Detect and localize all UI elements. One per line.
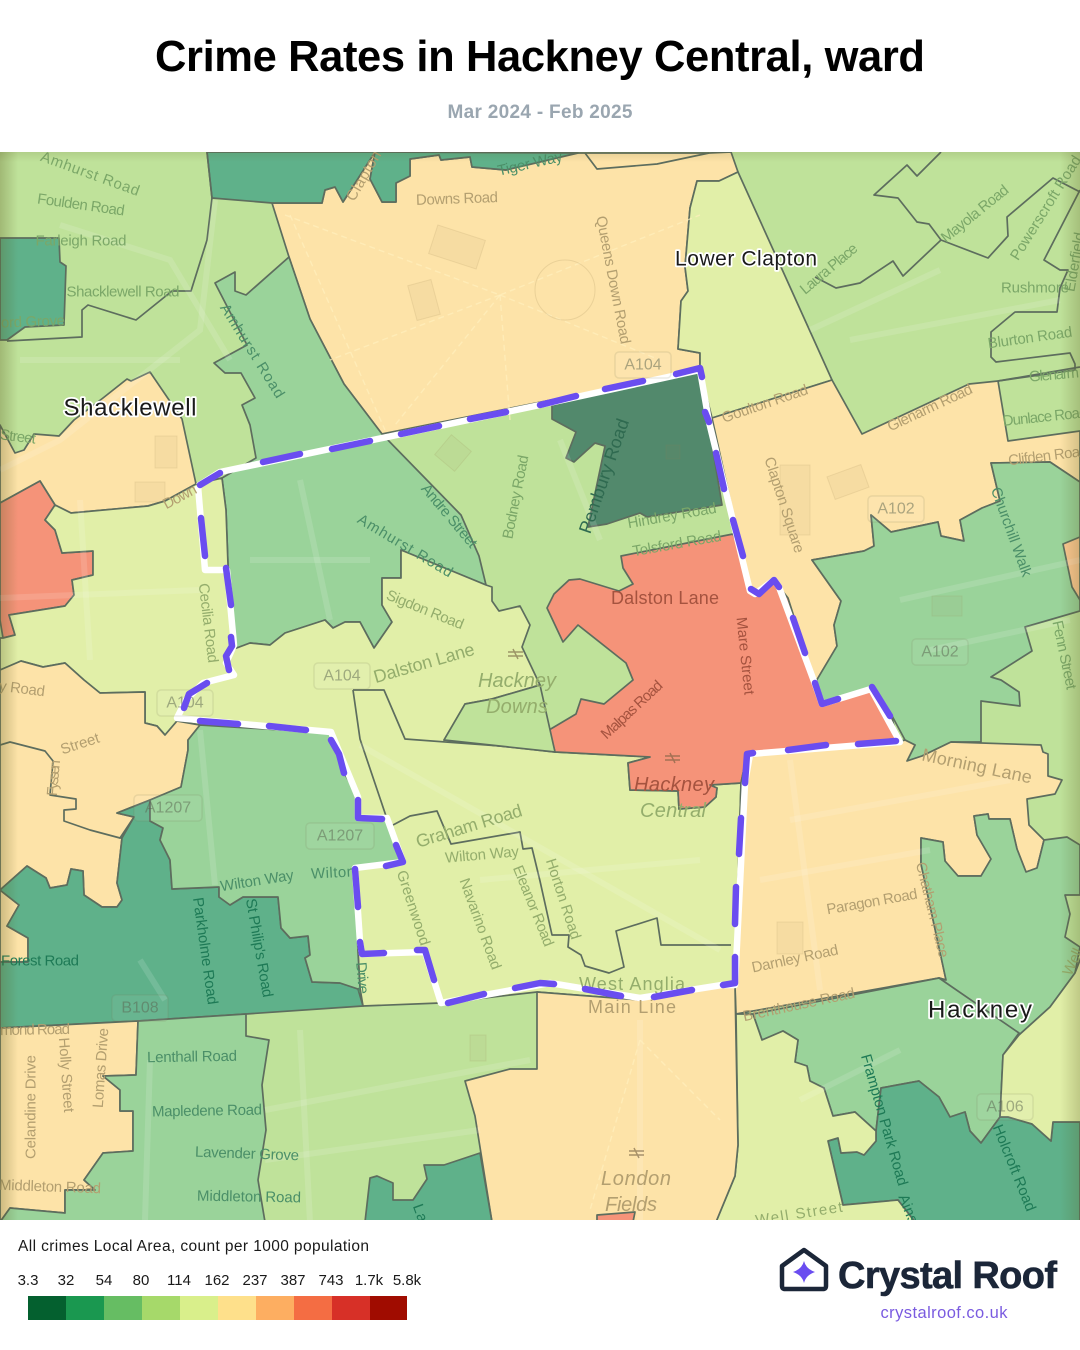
map labels: Fields <box>605 1194 657 1216</box>
map labels: Hackney <box>634 774 715 796</box>
street network and building footprints <box>0 200 1080 1222</box>
map labels: Downs <box>486 696 548 718</box>
legend colour swatches <box>28 1296 407 1320</box>
map labels: Street <box>58 729 102 758</box>
map labels: Hackney <box>928 996 1032 1024</box>
map labels: Horton Road <box>542 856 584 942</box>
map labels: Clapton Square <box>760 455 808 555</box>
map labels: Churchill Walk <box>987 485 1035 580</box>
map labels: ord Grove <box>1 312 65 332</box>
map edge vignette <box>0 152 1080 1220</box>
legend scale labels: 743 <box>318 1272 344 1289</box>
legend scale labels: 162 <box>204 1272 230 1289</box>
legend scale labels: 114 <box>167 1272 191 1289</box>
map labels: Central <box>640 800 707 822</box>
legend scale labels: 3.3 <box>18 1272 38 1289</box>
map labels: Lavender Grove <box>195 1144 299 1164</box>
map labels: Tolsford Road <box>631 528 723 560</box>
map labels: London <box>601 1168 671 1190</box>
map labels: Graham Road <box>413 800 525 852</box>
map labels: Wilton <box>311 863 355 883</box>
map labels: Mapledene Road <box>152 1102 262 1120</box>
map labels: Darnley Road <box>750 942 840 976</box>
title: Crime Rates in Hackney Central, ward <box>155 33 925 81</box>
map labels: Middleton Road <box>197 1188 301 1206</box>
map labels: Eleanor Road <box>509 863 557 949</box>
road number badges: A104 <box>624 356 662 374</box>
map labels: Fenn Street <box>1048 619 1080 692</box>
map labels: Sigdon Road <box>384 587 466 633</box>
map labels: Drive <box>352 961 372 995</box>
map labels: Hackney <box>478 670 557 692</box>
road number badges: A106 <box>986 1098 1024 1116</box>
map labels: Foulden Road <box>36 190 126 220</box>
map labels: Holly Street <box>55 1037 77 1114</box>
map labels: Navarino Road <box>456 876 504 972</box>
legend scale labels: 1.7k <box>355 1272 384 1289</box>
icon: house with star <box>782 1250 826 1289</box>
road number badges: A1207 <box>317 828 363 844</box>
map labels: Down <box>160 481 200 513</box>
map labels: Farleigh Road <box>36 232 126 250</box>
map labels: Goulton Road <box>720 381 810 427</box>
map labels: Wilton Way <box>444 843 520 867</box>
map labels: West Anglia <box>579 974 686 994</box>
road number badges <box>112 352 1033 1120</box>
map labels: Shacklewell Road <box>66 284 180 300</box>
map labels: Clapton <box>343 148 385 204</box>
map labels: Holcroft Road <box>989 1122 1039 1214</box>
map labels: Fyssen <box>44 759 64 797</box>
map labels: Frampton Park Road <box>857 1052 911 1188</box>
ward boundary white line <box>177 370 900 1003</box>
map labels: mond Road <box>0 1021 70 1039</box>
legend <box>18 1238 422 1320</box>
map labels: Amhurst Road <box>354 511 456 581</box>
map labels: Blurton Road <box>987 324 1073 352</box>
map labels: Pembury Road <box>575 416 633 536</box>
road number badges: A104 <box>166 694 204 712</box>
map labels: Malpas Road <box>598 677 666 743</box>
map labels: Forest Road <box>1 952 79 970</box>
map labels: Morning Lane <box>920 745 1034 787</box>
crime rate area polygons <box>0 152 1080 1222</box>
map labels: Bodney Road <box>500 454 532 540</box>
ward boundary purple dashes <box>184 368 896 1003</box>
map labels: Tiger Way <box>496 148 565 180</box>
road number badges: A102 <box>877 500 915 518</box>
map labels: Laura Place <box>797 240 861 298</box>
map labels: Cecilia Road <box>195 582 221 664</box>
logo wordmark: Crystal Roof <box>838 1255 1057 1297</box>
legend scale labels: 32 <box>58 1272 74 1289</box>
map labels: St Philip's Road <box>242 897 276 999</box>
map labels: Lenthall Road <box>147 1048 237 1066</box>
map labels: Amhurst Road <box>216 301 288 401</box>
map labels: Well Street <box>754 1199 845 1229</box>
road number badges: A102 <box>921 644 959 660</box>
road number badges: A1207 <box>145 800 191 816</box>
map labels: Paragon Road <box>825 886 919 918</box>
map labels: Hindrey Road <box>626 500 718 532</box>
map labels: Andre Street <box>417 481 481 552</box>
legend scale labels: 80 <box>133 1272 149 1289</box>
legend scale labels: 5.8k <box>393 1272 422 1289</box>
map labels: Glenarm <box>1028 364 1080 386</box>
map labels: Queens Down Road <box>592 215 634 345</box>
map labels: Street <box>0 426 38 448</box>
map labels: Mare Street <box>732 616 758 696</box>
date range subtitle: Mar 2024 - Feb 2025 <box>448 102 633 123</box>
legend scale labels: 237 <box>242 1272 268 1289</box>
legend scale labels: 54 <box>96 1272 112 1289</box>
map labels: Dalston Lane <box>371 639 477 687</box>
legend title: All crimes Local Area, count per 1000 population <box>18 1238 369 1255</box>
legend scale labels: 387 <box>280 1272 306 1289</box>
map labels: La <box>409 1202 431 1225</box>
map labels: Dalston Lane <box>611 588 719 608</box>
map labels: Ains <box>894 1192 922 1226</box>
map labels: Downs Road <box>416 189 498 209</box>
map labels: Glenarm Road <box>885 381 975 435</box>
map labels: Middleton Road <box>0 1177 101 1197</box>
map labels: Rushmore <box>1001 280 1069 296</box>
map labels: Mayola Road <box>938 182 1012 246</box>
map labels: Greenwood <box>393 868 433 948</box>
road number badges: A104 <box>323 668 361 684</box>
map labels: Main Line <box>588 997 676 1017</box>
map labels: Lower Clapton <box>675 248 817 270</box>
railway station symbols <box>508 649 680 1158</box>
map labels: Celandine Drive <box>22 1055 40 1159</box>
map labels: Lomas Drive <box>90 1028 112 1108</box>
map labels: Shacklewell <box>64 394 196 422</box>
map labels: Brenthouse Road <box>741 985 857 1025</box>
map labels: Chatham Place <box>912 860 952 960</box>
website address: crystalroof.co.uk <box>880 1304 1008 1322</box>
map labels: Parkholme Road <box>189 896 221 1006</box>
map labels: Wilton Way <box>219 867 295 895</box>
legend scale labels <box>18 1272 422 1289</box>
map labels: Amhurst Road <box>38 148 142 200</box>
Crystal Roof logo <box>782 1250 1057 1322</box>
road number badges: B108 <box>121 1000 159 1016</box>
